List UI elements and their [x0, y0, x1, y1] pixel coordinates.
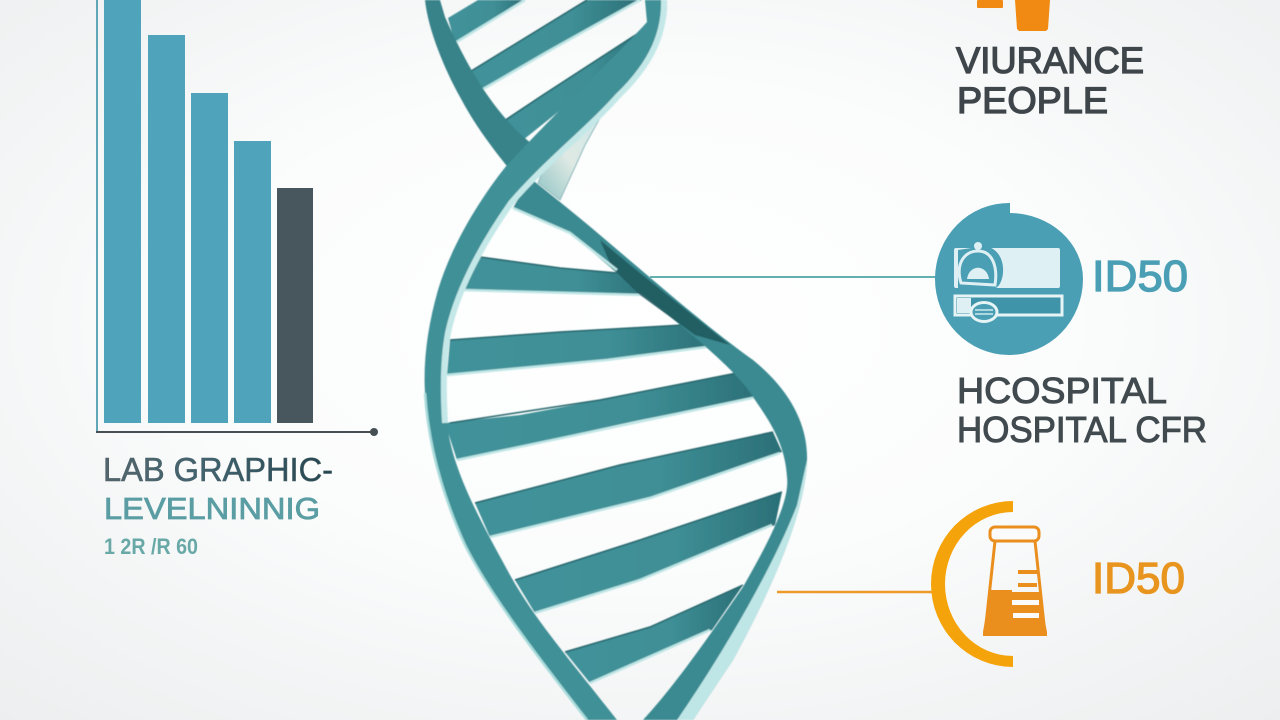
strand B left edge: [425, 393, 587, 720]
strand A upper: [425, 0, 540, 170]
base pair highlights: [447, 0, 780, 683]
chart caption: 1 2R /R 60: [104, 534, 198, 559]
strand B: [425, 0, 667, 720]
icon: teal hospital circle: [935, 203, 1083, 355]
label: ID50 teal: ID50: [1092, 252, 1188, 301]
connector line: orange: [777, 591, 933, 593]
strand A lower band light edge: [513, 208, 617, 270]
chart caption: [103, 451, 333, 559]
strand A light edge: [677, 460, 807, 720]
base pair top shading: [450, 0, 782, 652]
text: hospital CFR: HOSPITAL CFR: [957, 409, 1207, 450]
strand B light band: [444, 0, 664, 423]
upper base pairs: [448, 0, 650, 148]
lower base pairs: [445, 257, 782, 683]
connector line: teal: [650, 276, 936, 278]
heading: viurance people: PEOPLE: [957, 80, 1108, 121]
label: ID50 orange: ID50: [1092, 554, 1185, 603]
chart caption: LEVELNINNIG: [104, 491, 320, 526]
pale twisted ribbon: [538, 118, 600, 200]
icon: orange flask with arc: [931, 501, 1047, 667]
strand A shadow: [600, 240, 730, 345]
bar chart: [96, 0, 378, 436]
text: hospital CFR: [957, 370, 1207, 450]
heading: viurance people: VIURANCE: [956, 40, 1144, 81]
icon: orange top shape: [977, 0, 1050, 31]
text: hospital CFR: HCOSPITAL: [957, 370, 1167, 411]
chart caption: LAB GRAPHIC-: [103, 451, 333, 488]
heading: viurance people: [956, 40, 1144, 121]
DNA double helix: [425, 0, 807, 720]
strand A lower: [513, 178, 807, 720]
